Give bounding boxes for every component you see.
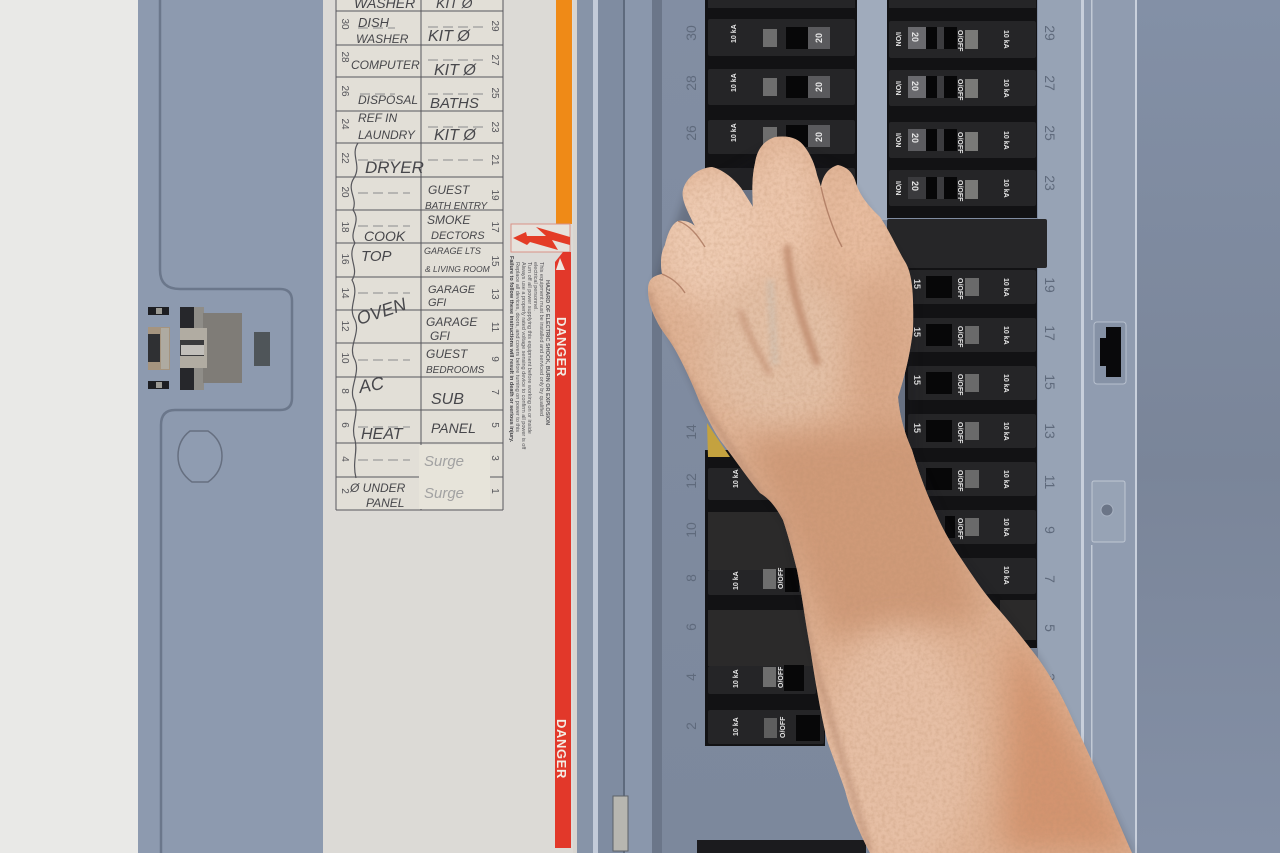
- circuit numbers: 19: [489, 189, 500, 201]
- right ratings: 10 kA: [1002, 326, 1009, 345]
- warning text: Failure to follow these instructions will result in death or serious injury.: [508, 256, 514, 443]
- right slot numbers: 29: [1042, 25, 1058, 41]
- right ratings: 10 kA: [1002, 30, 1009, 49]
- warning text: This equipment must be installed and serviced only by qualified: [538, 262, 544, 416]
- handwritten circuits right: PANEL: [431, 420, 476, 436]
- circuit numbers: 12: [339, 320, 350, 332]
- circuit numbers: 4: [339, 456, 350, 462]
- left ratings: 10 kA: [731, 24, 738, 43]
- handwritten circuits left: REF IN: [358, 111, 397, 125]
- right slot numbers: 23: [1042, 175, 1058, 191]
- left ratings: O/OFF: [778, 567, 785, 589]
- left ratings: 10 kA: [733, 571, 740, 590]
- circuit numbers: 23: [489, 121, 500, 133]
- right ratings: O/OFF: [956, 278, 963, 300]
- left breaker column: [697, 0, 866, 853]
- warning text: [508, 256, 550, 450]
- right ratings: 10 kA: [1002, 131, 1009, 150]
- directory label: [323, 0, 573, 853]
- knockout: [178, 431, 222, 482]
- right ratings: O/OFF: [956, 326, 963, 348]
- handwritten circuits right: GARAGE: [428, 284, 476, 296]
- left toggles: [763, 27, 830, 741]
- circuit numbers: 16: [339, 253, 350, 265]
- handwritten circuits right: SUB: [431, 391, 464, 408]
- veins: [740, 245, 818, 375]
- right ratings: O/OFF: [956, 518, 963, 540]
- right slot numbers: 15: [1042, 374, 1058, 390]
- surge stickers: [419, 445, 490, 509]
- right slot numbers: 13: [1042, 423, 1058, 439]
- breaker deadfront: [662, 0, 1085, 853]
- right ratings: I/ON: [894, 81, 901, 95]
- left slot numbers: 28: [683, 75, 699, 91]
- handwritten circuits right: BATH ENTRY: [425, 201, 489, 212]
- hinge: [613, 796, 628, 851]
- handwritten circuits left: AC: [356, 373, 386, 397]
- handwritten circuits right: KIT Ø: [434, 127, 477, 144]
- right ratings: 10 kA: [1002, 518, 1009, 537]
- wrist tone: [740, 420, 985, 640]
- circuit card: [336, 0, 503, 510]
- handwritten circuits right: GARAGE LTS: [424, 246, 481, 256]
- hand shadow: [651, 140, 1135, 853]
- right ratings: O/OFF: [956, 132, 963, 154]
- right breakers: [889, 0, 1036, 640]
- handwritten circuits right: GARAGE: [426, 315, 478, 329]
- breaker window: [1094, 322, 1126, 384]
- right slot numbers: 7: [1042, 575, 1058, 583]
- danger strip: [554, 252, 571, 848]
- handwritten circuits left: Ø UNDER: [349, 481, 406, 495]
- left ratings: [731, 24, 824, 738]
- circuit numbers: 6: [339, 422, 350, 428]
- right ratings: [894, 30, 1009, 585]
- handwritten circuits left: DISH: [358, 15, 390, 30]
- handwritten circuits left: COMPUTER: [351, 58, 420, 72]
- circuit numbers: 8: [339, 388, 350, 394]
- left slot numbers: 14: [683, 424, 699, 440]
- right ratings: 10 kA: [1002, 79, 1009, 98]
- right ratings: O/OFF: [956, 180, 963, 202]
- right slot numbers: 19: [1042, 277, 1058, 293]
- right ratings: 20: [910, 133, 920, 143]
- panel frame: [573, 0, 667, 853]
- circuit numbers: 30: [339, 18, 350, 30]
- circuit numbers: 25: [489, 87, 500, 99]
- left slot numbers: 4: [683, 673, 699, 681]
- filler bar: [887, 219, 1047, 268]
- right ratings: 10 kA: [1002, 278, 1009, 297]
- circuit numbers: 13: [489, 288, 500, 300]
- handwritten circuits left: WASHER: [356, 32, 409, 46]
- right ratings: I/ON: [894, 181, 901, 195]
- door embossed outline: [160, 0, 292, 853]
- orange strip: [556, 0, 572, 224]
- handwritten circuits right: GUEST: [426, 347, 469, 361]
- back of hand: [704, 281, 846, 426]
- right ratings: 20: [910, 181, 920, 191]
- circuit numbers: 27: [489, 54, 500, 66]
- danger strip: DANGER: [554, 317, 569, 377]
- handwritten circuits left: COOK: [364, 228, 406, 244]
- right ratings: O/OFF: [956, 30, 963, 52]
- warning text: Replace all devices, doors, and covers before turning on power to this: [514, 262, 520, 432]
- circuit numbers: 10: [339, 352, 350, 364]
- right toggles: [908, 27, 979, 538]
- right ratings: 10 kA: [1002, 374, 1009, 393]
- circuit numbers: 7: [489, 389, 500, 395]
- handwritten circuits right: [424, 0, 491, 436]
- right slot numbers: 9: [1042, 526, 1058, 534]
- left slot numbers: 2: [683, 722, 699, 730]
- left ratings: 20: [814, 82, 824, 92]
- right enclosure: [1137, 0, 1280, 853]
- right slot numbers: 3: [1042, 673, 1058, 681]
- left ratings: O/OFF: [778, 666, 785, 688]
- circuit numbers: [339, 18, 500, 494]
- left slot numbers: 26: [683, 125, 699, 141]
- handwritten circuits right: SMOKE: [427, 213, 471, 227]
- warning text: Turn off all power supplying this equipment before working on or inside: [526, 262, 532, 434]
- handwritten circuits right: GFI: [430, 329, 451, 343]
- handwritten circuits left: PANEL: [366, 496, 404, 510]
- skin base: [640, 130, 1140, 853]
- right ratings: I/ON: [894, 32, 901, 46]
- handwritten circuits right: GUEST: [428, 183, 471, 197]
- handwritten circuits right: DECTORS: [431, 230, 485, 242]
- left ratings: 10 kA: [733, 469, 740, 488]
- finger highlights: [655, 170, 785, 310]
- left ratings: 10 kA: [731, 123, 738, 142]
- right slot numbers: 25: [1042, 125, 1058, 141]
- hand and forearm: [640, 130, 1140, 853]
- left slot numbers: 12: [683, 473, 699, 489]
- right ratings: O/OFF: [956, 79, 963, 101]
- circuit numbers: 18: [339, 221, 350, 233]
- surge stickers: Surge: [424, 453, 464, 470]
- right ratings: 20: [910, 81, 920, 91]
- circuit numbers: 22: [339, 152, 350, 164]
- left slot numbers: 6: [683, 623, 699, 631]
- handwritten circuits left: DISPOSAL: [358, 93, 418, 107]
- right ratings: 15: [912, 279, 922, 289]
- circuit numbers: 3: [489, 455, 500, 461]
- right slot numbers: 17: [1042, 325, 1058, 341]
- handwritten circuits left: DRYER: [365, 158, 424, 177]
- left ratings: 10 kA: [733, 669, 740, 688]
- left slot numbers: [683, 25, 699, 730]
- circuit numbers: 17: [489, 221, 500, 233]
- right slot numbers: [1042, 25, 1058, 681]
- circuit numbers: 29: [489, 20, 500, 32]
- handwritten circuits right: GFI: [428, 297, 446, 309]
- circuit numbers: 11: [489, 322, 500, 333]
- left ratings: 20: [814, 132, 824, 142]
- left slot numbers: 30: [683, 25, 699, 41]
- circuit numbers: 26: [339, 85, 350, 97]
- brass tab: [707, 423, 730, 457]
- right slot numbers: 11: [1042, 475, 1058, 489]
- right ratings: O/OFF: [956, 374, 963, 396]
- danger strip: DANGER: [554, 719, 569, 779]
- right ratings: 15: [912, 327, 922, 337]
- latch assembly: [148, 307, 270, 390]
- right ratings: 10 kA: [1002, 422, 1009, 441]
- warning text: HAZARD OF ELECTRIC SHOCK, BURN OR EXPLOSION: [544, 280, 550, 425]
- circuit numbers: 21: [489, 154, 500, 166]
- circuit numbers: 1: [489, 488, 500, 494]
- handwritten circuits right: KIT Ø: [428, 28, 471, 45]
- handwritten circuits right: BEDROOMS: [426, 365, 485, 376]
- forearm warm side: [1000, 620, 1140, 853]
- bottom breaker edge: [697, 840, 866, 853]
- left breakers: [708, 0, 855, 744]
- handwritten circuits right: & LIVING ROOM: [425, 264, 491, 274]
- right ratings: 10 kA: [1002, 566, 1009, 585]
- circuit numbers: 2: [339, 488, 350, 494]
- right ratings: 15: [912, 375, 922, 385]
- left slot numbers: 8: [683, 574, 699, 582]
- panel right rail: [1084, 0, 1137, 853]
- right slot numbers: 27: [1042, 75, 1058, 91]
- right ratings: O/OFF: [956, 470, 963, 492]
- edge shading: [648, 290, 870, 853]
- right slot numbers: 5: [1042, 624, 1058, 632]
- right ratings: O/OFF: [956, 422, 963, 444]
- circuit numbers: 14: [339, 287, 350, 299]
- wall: [0, 0, 138, 853]
- handwritten circuits left: OVEN: [354, 294, 410, 329]
- circuit numbers: 15: [489, 255, 500, 267]
- right ratings: I/ON: [894, 133, 901, 147]
- circuit numbers: 5: [489, 422, 500, 428]
- surge stickers: Surge: [424, 485, 464, 502]
- right ratings: 20: [910, 32, 920, 42]
- handwritten circuits right: BATHS: [430, 95, 479, 112]
- skin texture: [640, 130, 1140, 853]
- shock icon: [511, 224, 570, 252]
- handwritten circuits right: KIT Ø: [434, 62, 477, 79]
- right ratings: 15: [912, 423, 922, 433]
- handwritten circuits left: TOP: [361, 248, 392, 265]
- circuit numbers: 28: [339, 51, 350, 63]
- right ratings: 10 kA: [1002, 179, 1009, 198]
- forearm light patch: [825, 630, 975, 853]
- left ratings: 10 kA: [731, 73, 738, 92]
- right breaker column: [887, 0, 1047, 648]
- handwritten circuits left: [349, 0, 424, 510]
- circuit numbers: 9: [489, 356, 500, 362]
- left ratings: O/OFF: [780, 716, 787, 738]
- handwritten circuits left: LAUNDRY: [358, 128, 416, 142]
- right ratings: 10 kA: [1002, 470, 1009, 489]
- left slot numbers: 10: [683, 522, 699, 538]
- circuit numbers: 24: [339, 118, 350, 130]
- handwritten circuits left: HEAT: [361, 426, 404, 443]
- warning text: electrical personnel.: [532, 262, 538, 311]
- panel door: [138, 0, 600, 853]
- circuit numbers: 20: [339, 186, 350, 198]
- finger creases: [662, 187, 842, 293]
- warning text: Always use a properly rated voltage sensing device to confirm all power is off: [520, 262, 526, 450]
- door catch: [1092, 481, 1125, 542]
- left ratings: 20: [814, 33, 824, 43]
- left ratings: 10 kA: [733, 717, 740, 736]
